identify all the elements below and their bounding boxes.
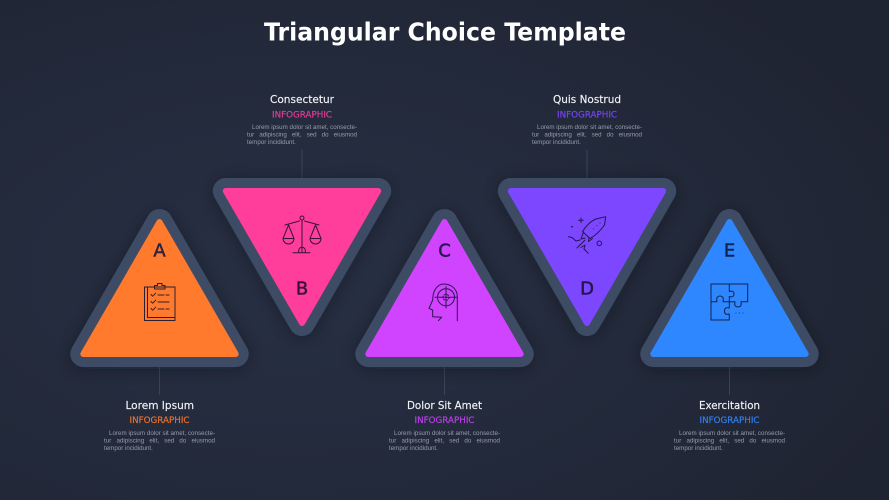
panel: E triangle xyxy=(653,222,806,395)
text block: Lorem Ipsum: tempor incididunt. xyxy=(104,445,153,452)
text block: Lorem Ipsum: Lorem ipsum dolor sit amet, consecte- xyxy=(109,430,215,437)
text block: Consectetur: Consectetur xyxy=(270,94,335,106)
letter C: C xyxy=(438,240,451,262)
text block: Lorem Ipsum: tur adipiscing elit, sed do eiusmod xyxy=(104,438,216,444)
icon: rocket xyxy=(568,217,606,253)
text block: Exercitation: Lorem ipsum dolor sit amet, consecte- xyxy=(679,430,785,437)
text block: Consectetur: tur adipiscing elit, sed do eiusmod xyxy=(247,132,358,138)
text block: Quis Nostrud: tur adipiscing elit, sed do eiusmod xyxy=(532,132,643,138)
icon: clipboard checklist xyxy=(144,284,175,320)
text block: Dolor Sit Amet: Dolor Sit Amet xyxy=(407,400,482,412)
text block: Quis Nostrud: INFOGRAPHIC xyxy=(557,110,617,120)
text block: Lorem Ipsum: INFOGRAPHIC xyxy=(130,416,190,426)
panel: A triangle xyxy=(83,222,236,395)
text block: Exercitation: tempor incididunt. xyxy=(674,445,723,452)
icon: balance scale xyxy=(283,216,321,253)
letter E: E xyxy=(724,240,735,262)
panel: D triangle xyxy=(511,150,663,323)
text block: Lorem Ipsum xyxy=(104,400,216,452)
text block: Quis Nostrud: Quis Nostrud xyxy=(553,94,621,106)
text block: Quis Nostrud: Lorem ipsum dolor sit amet, consecte- xyxy=(537,124,642,131)
text block: Quis Nostrud xyxy=(532,94,643,146)
text block: Lorem Ipsum: Lorem Ipsum xyxy=(126,400,194,412)
text block: Exercitation xyxy=(674,400,786,452)
text block: Exercitation: Exercitation xyxy=(699,400,760,412)
text block: Dolor Sit Amet xyxy=(389,400,501,452)
text block: Dolor Sit Amet: INFOGRAPHIC xyxy=(414,416,475,426)
text block: Quis Nostrud: tempor incididunt. xyxy=(532,139,581,146)
icon: head with target xyxy=(429,284,457,321)
text block: Dolor Sit Amet: tur adipiscing elit, sed do eiusmod xyxy=(389,438,501,444)
text block: Consectetur: Lorem ipsum dolor sit amet, consecte- xyxy=(252,124,357,131)
icon: puzzle pieces xyxy=(711,284,748,320)
text block: Dolor Sit Amet: tempor incididunt. xyxy=(389,445,438,452)
text block: Exercitation: INFOGRAPHIC xyxy=(700,416,760,426)
letter A: A xyxy=(153,240,166,262)
text block: Exercitation: tur adipiscing elit, sed do eiusmod xyxy=(674,438,786,444)
title: Triangular Choice Template xyxy=(264,18,626,46)
text block: Consectetur xyxy=(247,94,358,146)
panel: B triangle xyxy=(226,150,378,323)
text block: Consectetur: tempor incididunt. xyxy=(247,139,296,146)
text block: Dolor Sit Amet: Lorem ipsum dolor sit amet, consecte- xyxy=(394,430,500,437)
text block: Consectetur: INFOGRAPHIC xyxy=(272,110,332,120)
letter B: B xyxy=(296,278,308,300)
letter D: D xyxy=(580,278,594,300)
panel: C triangle xyxy=(368,222,521,395)
